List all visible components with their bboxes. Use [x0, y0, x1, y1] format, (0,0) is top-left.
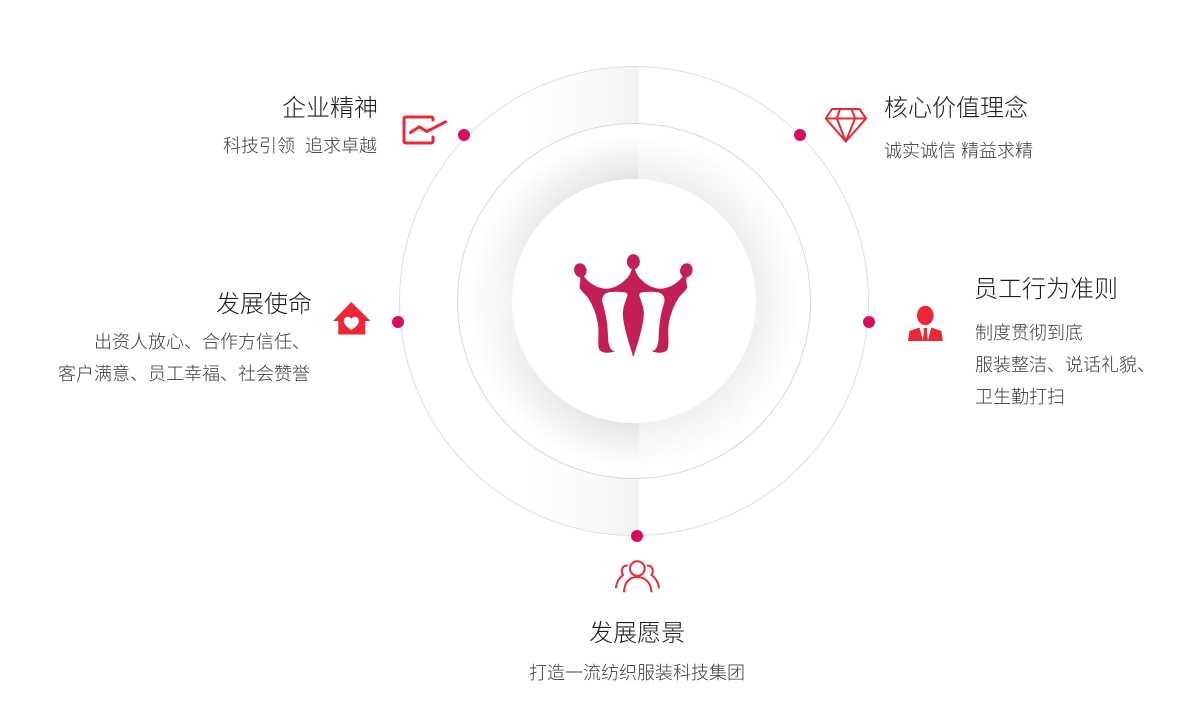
icon: group of people: [615, 560, 660, 592]
concentric circle diagram: [399, 66, 869, 536]
logo: crown of figures: [574, 254, 693, 356]
text: 诚实诚信 精益求精: 诚实诚信 精益求精: [884, 141, 1033, 161]
icon: person in suit: [908, 306, 943, 341]
heading: 发展使命: 发展使命: [216, 291, 312, 318]
marker dot: top left: [458, 129, 470, 141]
icon: diamond: [824, 108, 867, 142]
text: mission description: 出资人放心、合作方信任、: [94, 332, 310, 352]
marker dot: top right: [794, 129, 806, 141]
heading: 发展愿景: 发展愿景: [589, 620, 685, 647]
heading: 核心价值理念: 核心价值理念: [884, 95, 1028, 122]
text: mission description: 客户满意、员工幸福、社会赞誉: [58, 364, 310, 384]
icon: chart: [402, 116, 448, 144]
text: conduct description: 服装整洁、说话礼貌、: [975, 355, 1155, 375]
text: conduct description: 制度贯彻到底: [975, 323, 1083, 343]
center head and figure: [627, 255, 639, 269]
text: mission description: [58, 332, 310, 384]
text: 打造一流纺织服装科技集团: 打造一流纺织服装科技集团: [529, 663, 745, 683]
marker dot: left: [392, 316, 404, 328]
text: conduct description: [975, 323, 1155, 407]
icon: house with heart: [333, 302, 370, 334]
middle ring with shadow: [457, 123, 811, 479]
text: conduct description: 卫生勤打扫: [975, 387, 1065, 407]
marker dot: bottom: [631, 530, 643, 542]
outer ring: [399, 66, 869, 536]
heading: 员工行为准则: 员工行为准则: [974, 276, 1118, 303]
heading: 企业精神: 企业精神: [282, 95, 378, 122]
marker dot: right: [863, 316, 875, 328]
text: 科技引领 追求卓越: 科技引领 追求卓越: [223, 136, 377, 156]
inner white circle: [512, 179, 756, 423]
